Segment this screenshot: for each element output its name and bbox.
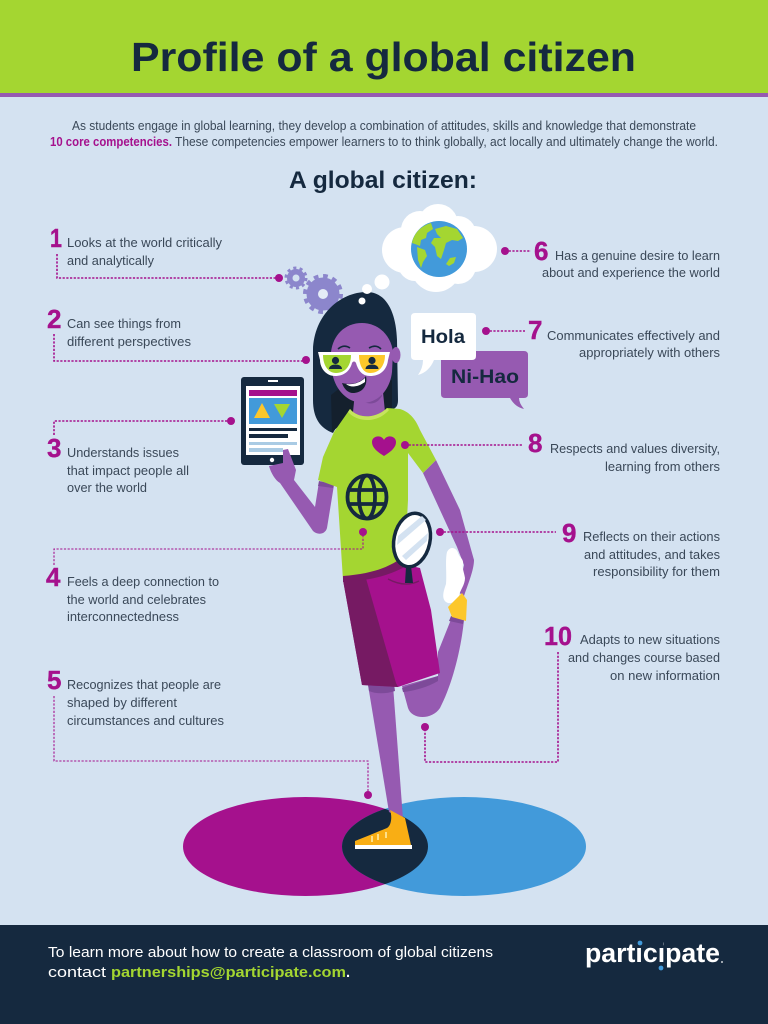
intro text: These competencies empower learners to to think globally, act locally and ultimately change the world. [175, 135, 718, 149]
shirt [318, 408, 436, 580]
neck [353, 392, 385, 420]
competency 7 [482, 315, 720, 360]
competency 4: Feels a deep connection to [67, 575, 219, 589]
intro text: As students engage in global learning, they develop a combination of attitudes, skills and knowledge that demonstrate [72, 119, 696, 133]
competency 10: Adapts to new situations [580, 633, 720, 647]
speech bubble: Ni-Hao [441, 351, 528, 409]
competency 2: 2 [47, 304, 61, 334]
footer [0, 925, 768, 1024]
competency 7: appropriately with others [579, 346, 720, 360]
competency 9: responsibility for them [593, 565, 720, 579]
character [241, 274, 474, 849]
competency 9: Reflects on their actions [583, 530, 720, 544]
glasses [318, 352, 390, 376]
competency 1: Looks at the world critically [67, 236, 223, 250]
competency 4: the world and celebrates [67, 593, 206, 607]
thought cloud with globe [382, 204, 497, 292]
footer text: contact [48, 965, 106, 981]
competency 8: Respects and values diversity, [550, 442, 720, 456]
competency 3: 3 [47, 433, 61, 463]
footer text: partnerships@participate.com [111, 965, 346, 981]
mouth [342, 376, 366, 393]
competency 9: and attitudes, and takes [584, 548, 720, 562]
competency 3 [47, 417, 235, 495]
subheading: A global citizen: [289, 167, 477, 194]
competency 5: circumstances and cultures [67, 714, 224, 728]
speech bubble: Hola: Hola [421, 327, 465, 348]
competency 10: on new information [610, 669, 720, 683]
speech bubble: Hola [411, 313, 476, 375]
intro text: 10 core competencies. [50, 135, 172, 149]
competency 3: Understands issues [67, 446, 179, 460]
competency 1 [50, 223, 283, 282]
raised leg [402, 617, 464, 717]
competency 6: 6 [534, 236, 548, 266]
competency 9 [436, 518, 720, 579]
icon: globe [411, 221, 467, 277]
competency 8: 8 [528, 428, 542, 458]
speech bubble: Ni-Hao: Ni-Hao [451, 367, 519, 388]
competency 4: interconnectedness [67, 610, 179, 624]
hair [313, 292, 398, 433]
standing leg [368, 685, 403, 819]
footer text [48, 945, 493, 981]
foot sock [443, 548, 465, 603]
heart [372, 436, 396, 456]
competency 2 [47, 304, 310, 364]
icon: shirt globe [348, 476, 386, 518]
competency 5: 5 [47, 665, 61, 695]
competency 8: learning from others [605, 460, 720, 474]
face [331, 323, 393, 403]
competency 7: 7 [528, 315, 542, 345]
thought bubbles [358, 274, 390, 304]
competency 8 [401, 428, 720, 474]
competency 10: and changes course based [568, 651, 720, 665]
competency 6: about and experience the world [542, 266, 720, 280]
competency 1: and analytically [67, 254, 155, 268]
competency 2: different perspectives [67, 335, 191, 349]
competency 1: 1 [50, 223, 62, 253]
footer text: . [346, 965, 350, 981]
competency 9: 9 [562, 518, 576, 548]
competency 5: shaped by different [67, 696, 178, 710]
shoe [355, 810, 412, 849]
competency 3: over the world [67, 481, 147, 495]
header banner [0, 0, 768, 97]
competency 10 [421, 621, 720, 762]
tablet [241, 377, 304, 465]
right arm [423, 460, 474, 596]
venn ellipses [183, 797, 586, 896]
icon: gears [286, 268, 341, 312]
competency 6 [501, 236, 720, 280]
competency 6: Has a genuine desire to learn [555, 249, 720, 263]
competency 5 [47, 665, 372, 799]
mirror [389, 510, 435, 583]
competency 3: that impact people all [67, 464, 189, 478]
title: Profile of a global citizen [131, 34, 636, 80]
competency 7: Communicates effectively and [547, 329, 720, 343]
competency 10: 10 [544, 621, 572, 651]
shorts [343, 563, 440, 687]
intro text [50, 119, 718, 149]
logo: participate [585, 938, 720, 968]
competency 4: 4 [46, 562, 61, 592]
competency 5: Recognizes that people are [67, 678, 221, 692]
left arm and hand [269, 449, 334, 534]
competency 2: Can see things from [67, 317, 181, 331]
ear [392, 347, 400, 363]
competency 4 [46, 528, 367, 624]
footer text: To learn more about how to create a classroom of global citizens [48, 945, 493, 961]
